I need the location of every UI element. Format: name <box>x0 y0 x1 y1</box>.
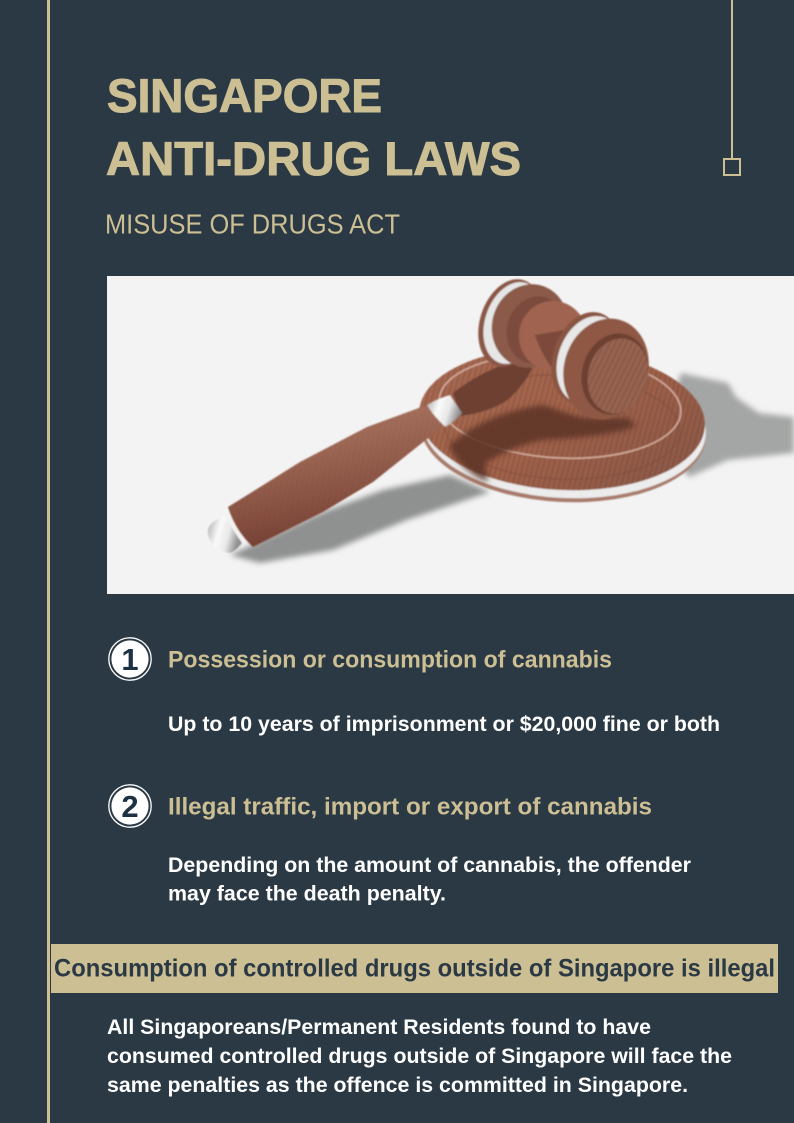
item 2 number badge: 2 <box>121 789 139 824</box>
sound block <box>418 356 706 504</box>
top right ornament: line and square <box>724 0 740 175</box>
item 1 heading: Possession or consumption of cannabis <box>168 646 612 674</box>
subtitle: MISUSE OF DRUGS ACT <box>105 208 400 240</box>
item 2 body: Depending on the amount of cannabis, the offender <box>168 853 691 877</box>
banner: Consumption of controlled drugs outside of Singapore is illegal <box>54 954 775 982</box>
item 2 heading: Illegal traffic, import or export of cannabis <box>168 794 652 820</box>
title: SINGAPORE <box>107 69 382 122</box>
closing paragraph: All Singaporeans/Permanent Residents found to have <box>107 1015 651 1039</box>
shadows <box>230 373 794 563</box>
item 2 body: may face the death penalty. <box>168 882 446 906</box>
item 2 body <box>168 853 691 906</box>
item 1 number badge: 1 <box>121 642 139 677</box>
handle <box>208 361 532 553</box>
photo: gavel and sound block <box>107 271 794 594</box>
title <box>106 69 521 185</box>
title: ANTI-DRUG LAWS <box>106 132 521 185</box>
closing paragraph: consumed controlled drugs outside of Singapore will face the <box>107 1044 732 1068</box>
closing paragraph: same penalties as the offence is committed in Singapore. <box>107 1073 688 1097</box>
shadow of the gavel on the block <box>449 405 636 482</box>
item 1 number badge <box>109 638 151 680</box>
item 2 number badge <box>109 785 151 827</box>
item 1 body: Up to 10 years of imprisonment or $20,000 fine or both <box>168 712 720 736</box>
closing paragraph <box>107 1015 732 1097</box>
banner <box>51 944 778 993</box>
left vertical gold line <box>47 0 50 1123</box>
head <box>477 278 650 420</box>
